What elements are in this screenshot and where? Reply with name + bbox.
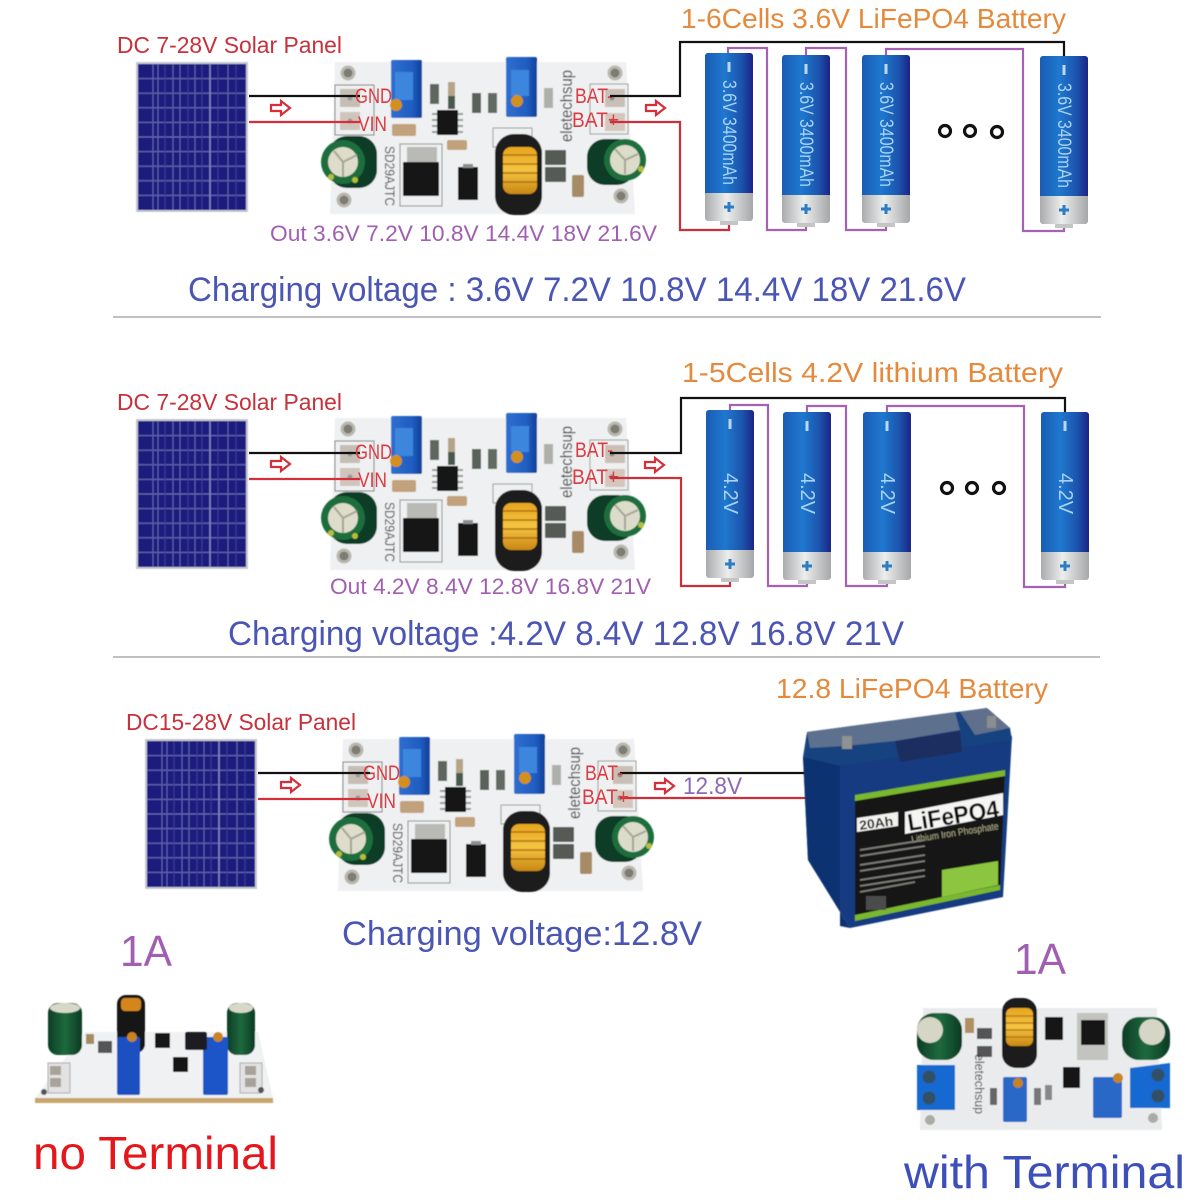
GND label: GND [363,762,400,785]
cell n [1040,56,1088,228]
cell 2 [783,412,831,584]
section 1: 1-6 cells LiFePO4 wiring [117,3,1088,309]
input direction arrow [271,101,290,115]
section 3: 12.8V LiFePO4 pack wiring [126,673,1048,953]
battery label: 12.8 LiFePO4 Battery [776,673,1048,704]
VIN label: VIN [358,113,387,136]
section 2: 1-5 cells lithium wiring [117,357,1089,653]
input positive wire [249,121,360,123]
with-terminal variant [903,935,1185,1198]
battery chain label: 1-6Cells 3.6V LiFePO4 Battery [681,3,1066,34]
cell 2: 3.6V 3400mAh [795,82,816,187]
current rating: 1A [120,927,173,976]
ellipsis dots [940,126,1002,138]
series link wires [728,48,1064,231]
input negative wire [258,772,370,774]
solar panel [145,739,257,889]
VIN label: VIN [358,469,387,492]
cell n: 3.6V 3400mAh [1053,83,1074,188]
cell 2: 4.2V [796,473,818,515]
BAT minus label: BAT- [575,85,613,108]
cell 1 [706,410,754,582]
BAT plus label: BAT+ [582,786,629,809]
negative wire [610,42,1064,96]
cell 2 [782,55,830,227]
input negative wire [249,452,360,454]
charging voltage heading: Charging voltage:12.8V [342,915,702,953]
charger board [321,57,646,215]
12.8V LiFePO4 battery pack: Lithium Iron Phosphate [911,821,1000,846]
variant caption: with Terminal [903,1146,1185,1198]
output direction arrow [645,458,664,472]
cell 3: 3.6V 3400mAh [875,82,896,187]
cell 1 [705,53,753,225]
charging voltage heading: Charging voltage : 3.6V 7.2V 10.8V 14.4V 18V 21.6V [188,271,966,309]
input direction arrow [281,778,300,792]
cell 1: 3.6V 3400mAh [718,80,739,185]
series link wires [730,405,1065,587]
output voltage list: Out 4.2V 8.4V 12.8V 16.8V 21V [330,574,651,599]
12.8V LiFePO4 battery pack: 20Ah [858,813,894,833]
no-terminal variant [33,927,278,1179]
solar panel label: DC 7-28V Solar Panel [117,32,342,58]
input positive wire [258,798,370,800]
solar panel label: DC15-28V Solar Panel [126,709,356,735]
BAT plus label: BAT+ [572,466,619,489]
output direction arrow [646,101,665,115]
12.8V LiFePO4 battery pack: LiFePO4 [906,796,1001,837]
cell n: 4.2V [1054,473,1076,515]
input negative wire [249,95,360,97]
BAT minus label: BAT- [585,762,623,785]
battery chain label: 1-5Cells 4.2V lithium Battery [682,357,1063,388]
charger board [329,734,654,892]
negative wire [610,398,1065,453]
ellipsis dots [942,482,1004,494]
solar panel label: DC 7-28V Solar Panel [117,389,342,415]
input direction arrow [271,457,290,471]
variant caption: no Terminal [33,1127,278,1179]
board with terminals: eletechsup [972,1054,987,1114]
cell 3 [863,412,911,584]
solar panel [136,419,248,569]
output positive wire [620,797,806,799]
board with terminals [917,998,1170,1130]
GND label: GND [355,441,392,464]
12.8V LiFePO4 battery pack [803,708,1012,928]
cell n [1041,412,1089,584]
BAT plus label: BAT+ [572,109,619,132]
solar panel [136,62,248,212]
positive wire [610,478,730,586]
output negative wire [620,772,806,774]
cell 3: 4.2V [876,473,898,515]
VIN label: VIN [367,790,396,813]
BAT minus label: BAT- [575,439,613,462]
charger board [321,413,646,571]
positive wire [610,122,729,230]
output voltage label: 12.8V [683,773,742,800]
GND label: GND [355,85,392,108]
board without terminals [35,995,273,1103]
output direction arrow [655,779,674,793]
charging voltage heading: Charging voltage :4.2V 8.4V 12.8V 16.8V 21V [228,615,904,653]
current rating: 1A [1014,935,1067,984]
input positive wire [249,478,360,480]
cell 3 [862,55,910,227]
output voltage list: Out 3.6V 7.2V 10.8V 14.4V 18V 21.6V [270,221,657,246]
cell 1: 4.2V [719,473,741,515]
